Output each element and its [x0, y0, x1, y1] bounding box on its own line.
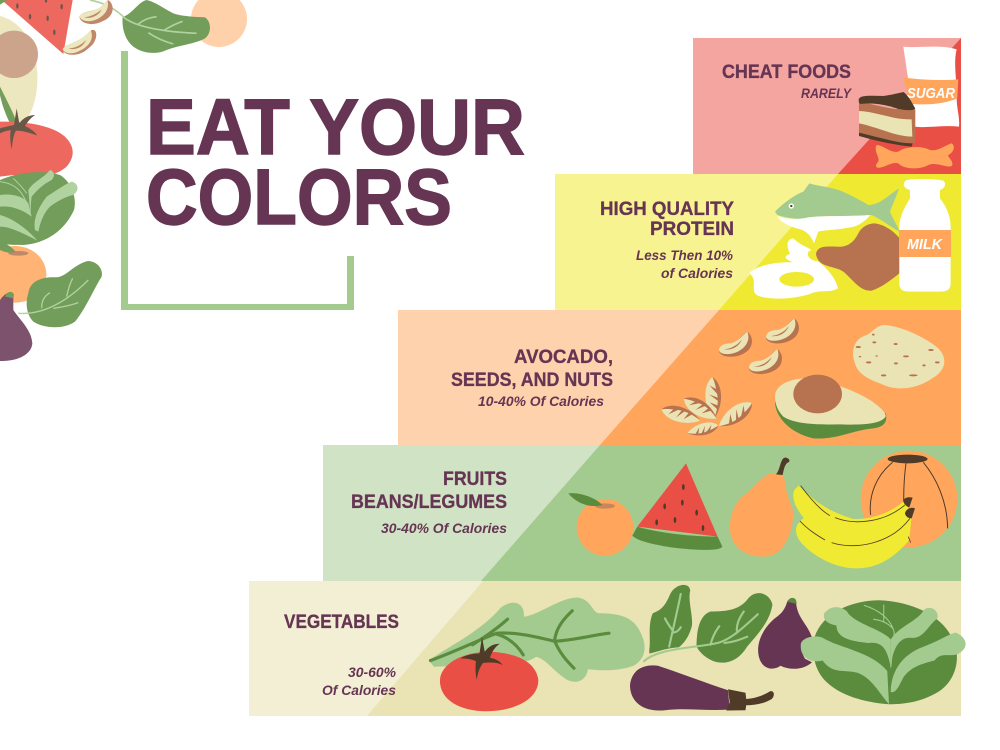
heading: fruits beans legumes: BEANS/LEGUMES — [351, 492, 507, 513]
icon: round fruit with ribs — [861, 451, 957, 547]
icon: fish — [775, 183, 899, 243]
icon: spinach top — [90, 0, 210, 53]
icon: avocado half — [0, 16, 38, 124]
heading: avocado seeds and nuts: AVOCADO, — [514, 347, 613, 368]
icon: cabbage — [801, 600, 966, 704]
title — [146, 82, 525, 241]
text: rarely: RARELY — [801, 85, 852, 101]
text: less then 10 percent: of Calories — [661, 265, 733, 281]
icon: fig — [0, 292, 32, 361]
heading: avocado seeds and nuts: SEEDS, AND NUTS — [451, 370, 613, 391]
icon: peach top — [191, 0, 247, 47]
icon: eggplant — [630, 665, 774, 711]
title frame — [121, 51, 354, 310]
icon: sugar bag — [903, 47, 959, 127]
icon: pear — [730, 458, 793, 557]
icon: cabbage — [0, 170, 78, 245]
title: COLORS — [146, 152, 452, 241]
icon: sugar bag: SUGAR — [907, 85, 955, 102]
text: less then 10 percent — [636, 247, 734, 281]
heading: fruits beans legumes — [351, 469, 507, 513]
panel: fruits beans legumes — [323, 445, 961, 581]
panel: cheat foods — [693, 38, 961, 174]
icon: almonds — [659, 377, 757, 438]
icon: chicken leg — [816, 223, 909, 291]
heading: fruits beans legumes: FRUITS — [443, 469, 507, 490]
icon: avocado — [775, 375, 886, 439]
panel: avocado seeds and nuts — [398, 310, 961, 445]
icon: cake slice — [859, 92, 915, 147]
icon: leafy green — [429, 598, 645, 682]
icon: cashews — [719, 318, 799, 374]
icon: candy — [876, 143, 954, 168]
text: 10-40 percent: 10-40% Of Calories — [478, 393, 604, 409]
icon: orange — [0, 242, 46, 303]
decorative food column — [0, 0, 247, 361]
heading: avocado seeds and nuts — [451, 347, 613, 391]
icon: fried egg — [749, 238, 838, 299]
icon: orange — [568, 493, 633, 556]
heading: high quality protein: PROTEIN — [650, 219, 734, 240]
icon: milk bottle — [899, 179, 951, 292]
icon: tomato — [0, 108, 73, 178]
text: 30-60 percent: 30-60% — [348, 664, 397, 680]
icon: spinach side — [18, 261, 102, 327]
icon: milk bottle: MILK — [907, 236, 943, 253]
icon: cashews — [63, 0, 113, 55]
icon: watermelon slice — [0, 0, 73, 54]
heading: high quality protein — [600, 199, 734, 240]
icon: fig — [758, 598, 812, 669]
title: EAT YOUR — [146, 82, 525, 171]
icon: spinach — [644, 585, 772, 663]
text: 30-60 percent — [322, 664, 397, 698]
text: 30-60 percent: Of Calories — [322, 682, 396, 698]
icon: watermelon — [632, 463, 722, 550]
heading: cheat foods: CHEAT FOODS — [722, 62, 851, 83]
icon: tomato — [440, 637, 538, 711]
icon: bananas — [793, 486, 915, 568]
text: 30-40 percent: 30-40% Of Calories — [381, 520, 507, 536]
text: less then 10 percent: Less Then 10% — [636, 247, 734, 263]
icon: potato — [853, 325, 944, 388]
panel: high quality protein — [555, 174, 961, 310]
panel: vegetables — [249, 581, 966, 716]
heading: vegetables: VEGETABLES — [284, 612, 399, 633]
heading: high quality protein: HIGH QUALITY — [600, 199, 734, 220]
